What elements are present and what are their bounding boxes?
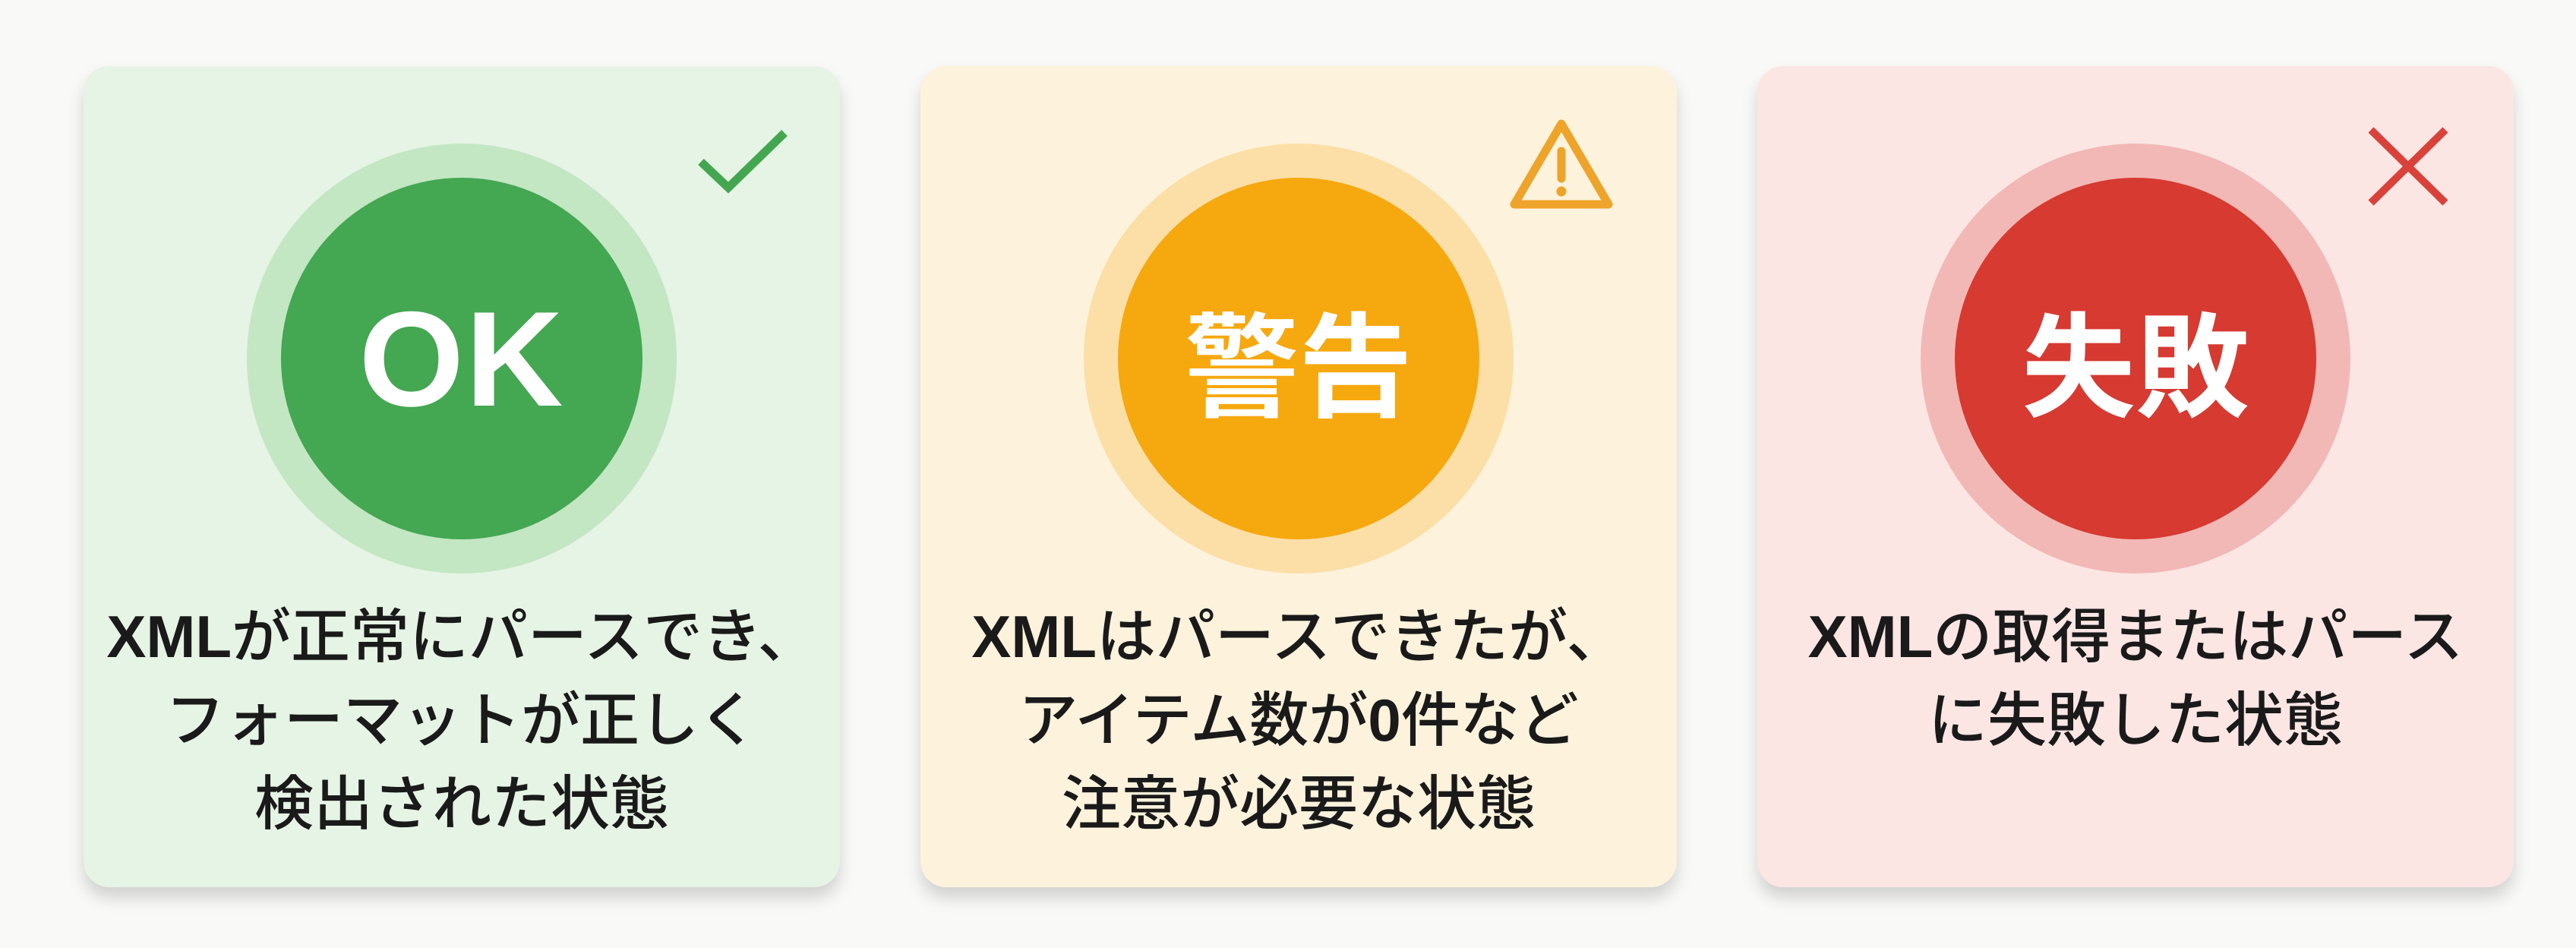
badge: 失敗 — [1921, 144, 2350, 574]
text: failure description: XMLの取得またはパース — [1808, 603, 2463, 670]
text: warning description — [971, 603, 1626, 837]
badge: OK: OK — [358, 283, 565, 434]
panel: OK — [84, 66, 840, 887]
text: OK description: 検出された状態 — [254, 770, 669, 837]
text: failure description — [1808, 603, 2463, 754]
icon: check mark — [698, 130, 788, 194]
text: failure description: に失敗した状態 — [1928, 687, 2343, 754]
text: OK description — [106, 603, 817, 837]
badge: 警告: 警告 — [1185, 304, 1413, 431]
panel: warning — [920, 66, 1677, 887]
text: OK description: XMLが正常にパースでき、 — [106, 603, 817, 670]
badge: OK — [247, 144, 677, 574]
text: OK description: フォーマットが正しく — [166, 687, 758, 754]
panel: failure — [1757, 66, 2514, 887]
icon: warning triangle — [1510, 120, 1613, 208]
icon: cross — [2368, 128, 2448, 205]
text: warning description: 注意が必要な状態 — [1062, 770, 1536, 837]
badge: 警告 — [1084, 144, 1514, 574]
text: warning description: アイテム数が0件など — [1018, 687, 1579, 754]
text: warning description: XMLはパースできたが、 — [971, 603, 1626, 670]
badge: 失敗: 失敗 — [2022, 304, 2249, 431]
